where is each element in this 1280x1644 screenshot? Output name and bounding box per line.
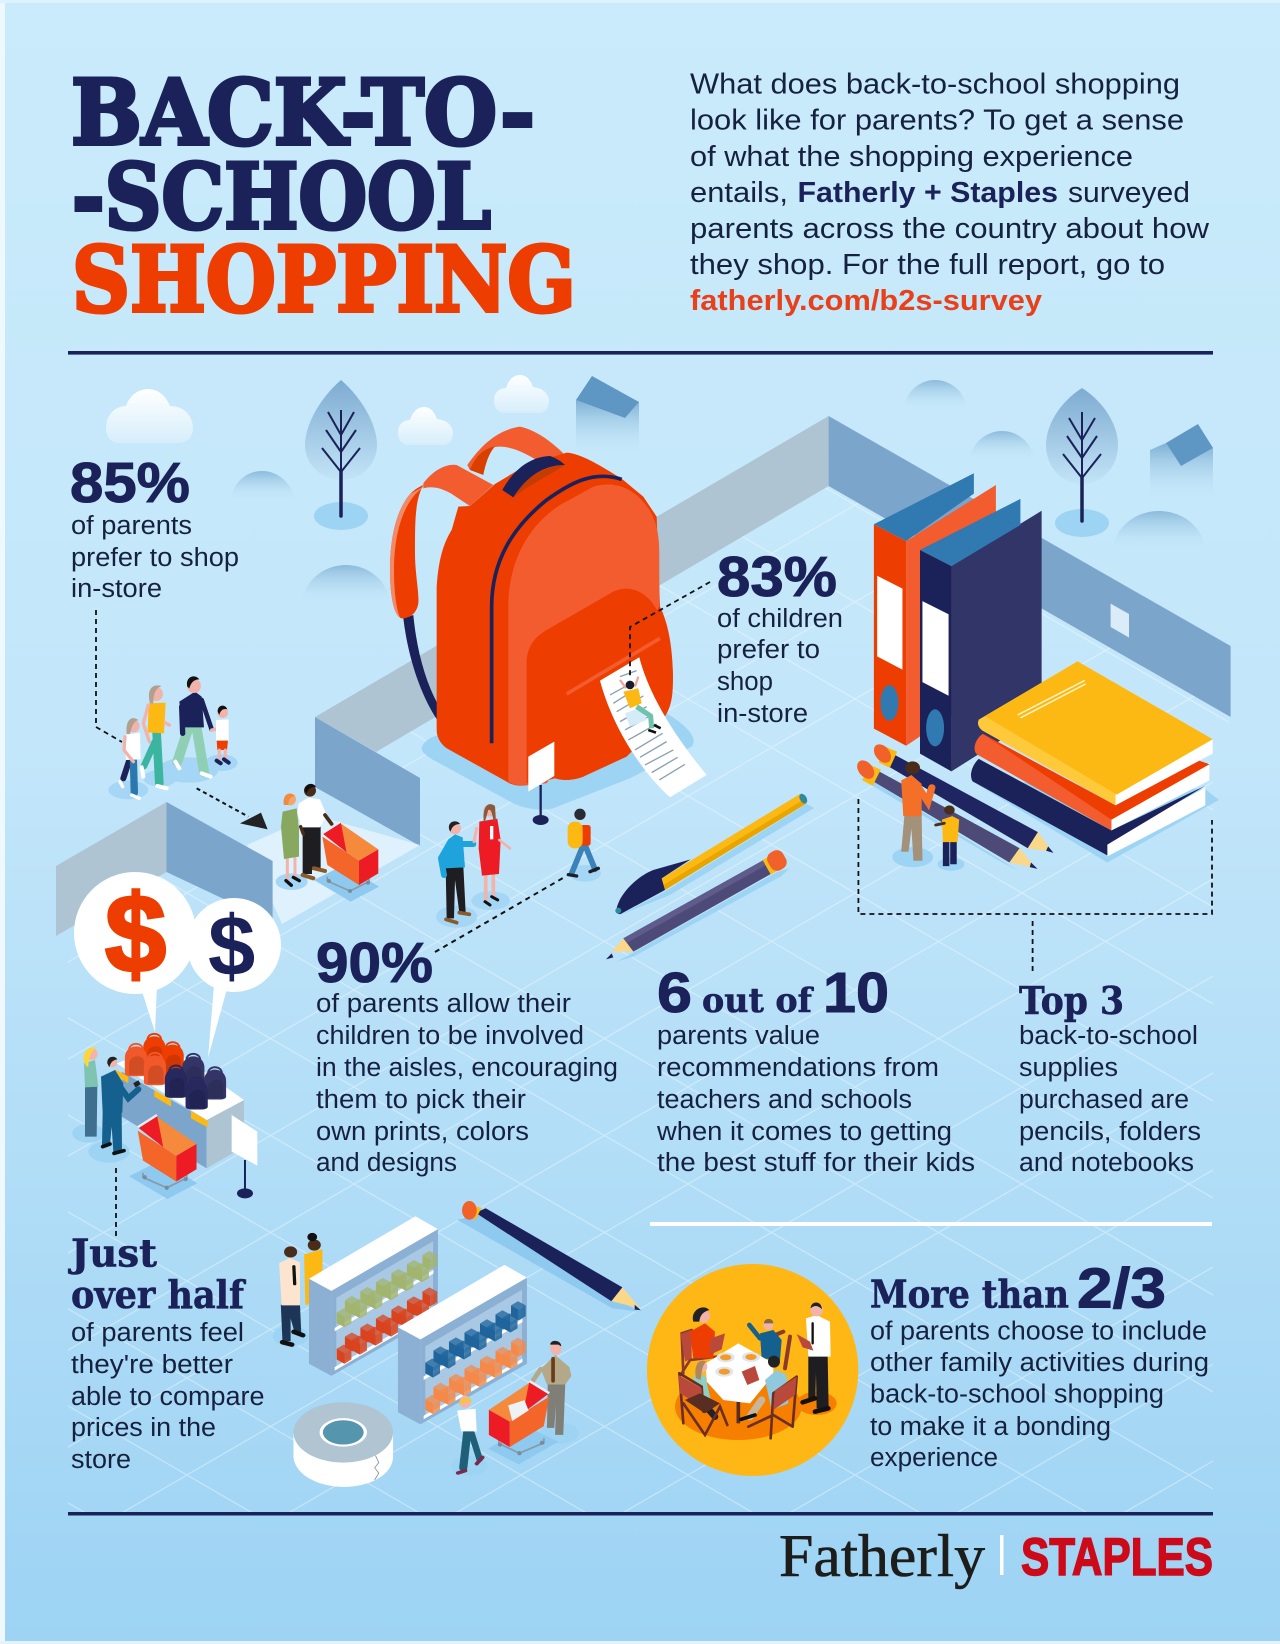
stat 6 out of 10: out of: [702, 981, 814, 1021]
stat 85%: of parents: [71, 512, 192, 540]
stat 6 out of 10: teachers and schools: [657, 1086, 912, 1114]
logo divider: [1000, 1535, 1004, 1575]
intro text: look like for parents? To get a sense: [690, 105, 1184, 137]
stat more than 2/3: 2/3: [1077, 1256, 1166, 1320]
stat top 3: pencils, folders: [1019, 1118, 1201, 1146]
stat 90%: own prints, colors: [316, 1118, 529, 1146]
man and child: [892, 761, 964, 871]
tree right: [1046, 388, 1118, 537]
navy pencil: [870, 742, 1053, 853]
waving child: [749, 1319, 790, 1368]
speech bubble small: $: [208, 899, 255, 994]
floor grid: [68, 486, 1231, 1512]
stat top 3: Top 3: [1019, 978, 1124, 1023]
stat more than 2/3: other family activities during: [870, 1349, 1209, 1377]
stat just over half: they're better: [71, 1351, 234, 1379]
yellow pen: [615, 792, 814, 915]
family and couple with cart: [108, 676, 379, 902]
people: man, woman, boy: [436, 792, 814, 962]
purple pencil: [606, 847, 789, 962]
intro text: What does back-to-school shopping: [690, 69, 1180, 101]
cart: [129, 1115, 197, 1199]
stat 6 out of 10: [656, 961, 975, 1177]
background scenery: domes: [231, 380, 1205, 606]
house right: [1150, 424, 1213, 502]
stat 6 out of 10: 6: [657, 961, 692, 1025]
couple with cart: [276, 784, 332, 890]
purple pencil: [854, 758, 1038, 871]
stat 90%: of parents allow their: [316, 990, 572, 1018]
intro text: [690, 69, 1209, 317]
blonde woman: [451, 1396, 488, 1476]
stat just over half: Just: [68, 1230, 157, 1276]
stat 6 out of 10: parents value: [657, 1022, 820, 1050]
sign: [232, 1115, 257, 1198]
stat just over half: prices in the: [71, 1414, 216, 1442]
title: SHOPPING: [72, 227, 576, 333]
cart red: [488, 1381, 558, 1464]
intro text: of what the shopping experience: [690, 141, 1133, 173]
speech bubble large: $: [105, 873, 166, 996]
stat just over half: of parents feel: [71, 1319, 244, 1347]
arrow line: [197, 788, 248, 817]
intro text: they shop. For the full report, go to: [690, 249, 1165, 281]
stat 83%: prefer to: [717, 636, 820, 664]
stat more than 2/3: to make it a bonding: [870, 1413, 1111, 1441]
speech bubble small: [187, 898, 281, 1058]
shoppers: [72, 1047, 141, 1163]
stat top 3: supplies: [1019, 1054, 1118, 1082]
red binder: [874, 473, 996, 746]
stat 6 out of 10: 10: [823, 961, 889, 1025]
stat more than 2/3: back-to-school shopping: [870, 1380, 1164, 1408]
stat more than 2/3: [870, 1256, 1209, 1472]
stat more than 2/3: More than: [870, 1272, 1069, 1316]
stat 83%: shop: [717, 668, 773, 696]
store counter with backpacks: [72, 1034, 257, 1199]
stat 83%: in-store: [717, 700, 808, 728]
backpack: [390, 427, 707, 825]
path between walls: [247, 815, 420, 924]
logo Staples: STAPLES: [1021, 1528, 1213, 1587]
stat 83%: 83%: [717, 545, 837, 609]
stat 6 out of 10: recommendations from: [657, 1054, 939, 1082]
stat 90%: in the aisles, encouraging: [316, 1054, 618, 1082]
stat just over half: store: [71, 1446, 131, 1474]
girl in chair: [678, 1361, 727, 1435]
stat 85%: 85%: [70, 451, 190, 515]
stat 83%: [717, 545, 843, 728]
shoppers at shelf: [273, 1233, 322, 1346]
rules: [68, 351, 1213, 1516]
dashed line 83%: [630, 582, 710, 677]
binders books pencils: [854, 473, 1219, 871]
back wall: [315, 416, 1231, 846]
intro text: parents across the country about how: [690, 213, 1209, 245]
shopper with cart: [533, 1341, 579, 1444]
clouds: [106, 375, 549, 445]
title: [71, 60, 576, 333]
stat more than 2/3: experience: [870, 1444, 998, 1472]
stat more than 2/3: of parents choose to include: [870, 1318, 1207, 1346]
stat 90%: [316, 931, 618, 1177]
tape roll: [293, 1402, 393, 1487]
speech bubble large: [74, 872, 196, 1032]
navy binder: [920, 499, 1042, 771]
stat top 3: and notebooks: [1019, 1149, 1194, 1177]
title: BACK-TO-: [71, 60, 535, 166]
stat 90%: them to pick their: [316, 1086, 527, 1114]
intro text: entails,: [690, 177, 788, 209]
stat 85%: in-store: [71, 575, 162, 603]
dashed line 85%: [96, 610, 122, 742]
stat 85%: prefer to shop: [71, 544, 239, 572]
shelf 1: [309, 1216, 438, 1376]
logo Fatherly: Fatherly: [779, 1523, 985, 1589]
stat 6 out of 10: the best stuff for their kids: [657, 1149, 975, 1177]
stat 85%: [70, 451, 239, 603]
boy in chair with menu: [741, 1356, 797, 1438]
backpacks on counter: [125, 1034, 226, 1110]
stat top 3: purchased are: [1019, 1086, 1189, 1114]
seated mother: [681, 1307, 725, 1373]
stat 6 out of 10: when it comes to getting: [656, 1118, 952, 1146]
table: [706, 1343, 773, 1423]
intro text: Fatherly + Staples: [798, 177, 1058, 209]
stat 90%: and designs: [316, 1149, 457, 1177]
cart: [314, 822, 379, 902]
dashed line just over half: [115, 1168, 117, 1237]
dashed bracket top 3: [858, 799, 1212, 975]
intro text: surveyed: [1068, 177, 1190, 209]
dashed line 90%: [435, 878, 563, 952]
waiter: [797, 1302, 831, 1412]
book stack: [971, 661, 1219, 862]
stat 90%: 90%: [316, 931, 433, 995]
stat 90%: children to be involved: [316, 1022, 584, 1050]
arrow head: [240, 813, 268, 829]
intro text: fatherly.com/b2s-survey: [690, 285, 1042, 317]
title: -SCHOOL: [72, 144, 491, 250]
stat just over half: [68, 1230, 264, 1474]
pencil navy: [457, 1201, 641, 1312]
receipt with child: [600, 657, 707, 797]
shelves, tape, people, pencil: [273, 1201, 641, 1487]
front wall: [56, 802, 273, 936]
stat top 3: [1019, 978, 1201, 1177]
stat top 3: back-to-school: [1019, 1022, 1198, 1050]
stat 83%: of children: [717, 605, 843, 633]
shelf 2: [398, 1265, 527, 1424]
restaurant circle: [647, 1264, 858, 1476]
family walking: [108, 676, 238, 799]
house left: [576, 376, 639, 457]
stat just over half: over half: [71, 1272, 246, 1317]
tree left: [305, 380, 377, 530]
stat just over half: able to compare: [71, 1383, 264, 1411]
